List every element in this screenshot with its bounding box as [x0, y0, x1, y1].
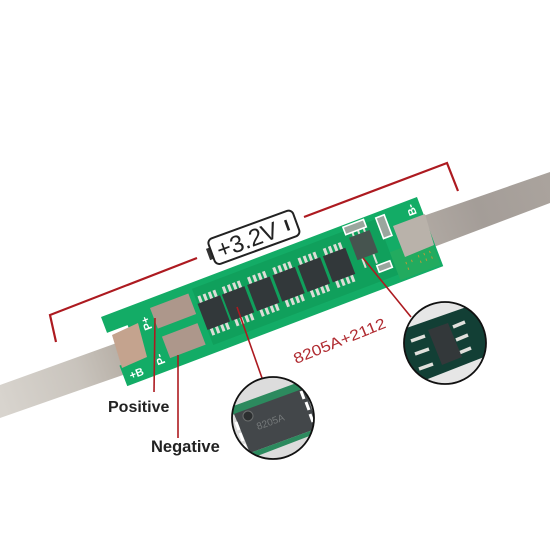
label: Negative: Negative [151, 438, 220, 456]
MOSFET row [195, 241, 358, 337]
circuit board [101, 197, 443, 386]
metal strip: right [400, 172, 550, 256]
label: +B: +B [128, 366, 146, 382]
metal strip: left [0, 340, 140, 418]
label: P+: P+ [139, 315, 155, 332]
gold test dots [403, 246, 433, 269]
leader line: MOSFET [237, 307, 262, 378]
leader line: negative [177, 355, 179, 438]
inner trace shading [192, 219, 398, 345]
control chip U2 [347, 224, 382, 270]
leader line: positive [154, 318, 155, 392]
silkscreen boxes [343, 212, 403, 279]
leader line: control chip [363, 258, 411, 317]
board body [101, 197, 443, 386]
dimension bracket: left [50, 258, 197, 342]
label: chip model: 8205A+2112 [291, 315, 388, 368]
solder tab: left [112, 323, 147, 368]
solder tab: right [393, 214, 434, 257]
label: Positive: Positive [108, 399, 169, 416]
label: B-: B- [404, 202, 420, 217]
pad: P- [162, 323, 206, 358]
chip marking: 8205A [255, 412, 287, 433]
magnifier: 8205A [228, 377, 320, 459]
voltage battery label [203, 209, 301, 268]
label: P-: P- [153, 351, 168, 366]
pad: P+ [150, 293, 196, 329]
magnifier: 2112 [403, 301, 487, 385]
dimension bracket: right [304, 163, 458, 217]
voltage battery label: +3.2V [213, 217, 282, 264]
